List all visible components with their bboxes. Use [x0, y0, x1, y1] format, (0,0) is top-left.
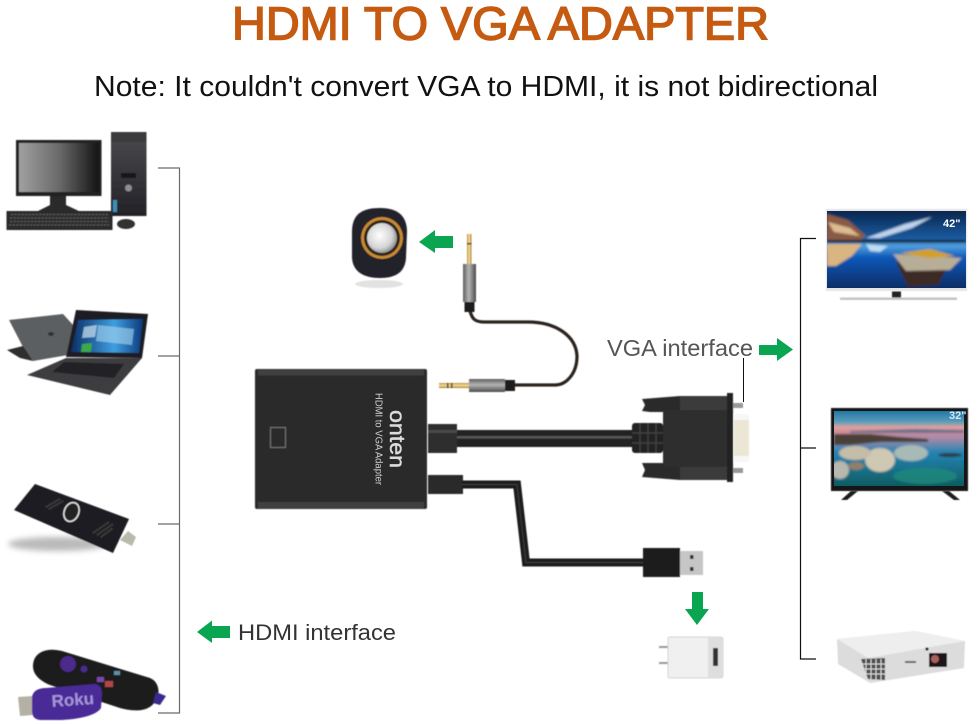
connector body	[663, 410, 728, 467]
adapter brand text: onten	[385, 410, 408, 468]
adapter body	[255, 369, 427, 509]
USB cable	[428, 475, 703, 577]
cable	[457, 430, 635, 447]
speaker body	[352, 208, 407, 278]
icon: desktop computer	[6, 132, 146, 230]
bracket: HDMI sources	[158, 168, 180, 713]
indicator square	[270, 428, 286, 448]
icon: 32 inch TV	[831, 408, 968, 500]
icon: speaker	[352, 208, 407, 288]
keyboard	[6, 211, 112, 230]
TV screen scene	[825, 209, 968, 290]
flange	[727, 393, 733, 482]
VGA pins shell	[734, 414, 749, 462]
stick shadow	[8, 537, 108, 551]
USB strain relief	[428, 475, 463, 494]
laptop screen	[66, 310, 148, 358]
Roku stick: Roku	[51, 689, 95, 711]
TV bezel	[831, 408, 968, 491]
label: VGA interface: VGA interface	[607, 335, 753, 361]
stick body	[14, 484, 129, 553]
VGA connector	[632, 393, 749, 482]
adapter model text: HDMI to VGA Adapter	[372, 393, 384, 485]
icon: laptop	[7, 310, 148, 395]
audio cable	[439, 234, 577, 392]
laptop keyboard deck	[27, 358, 142, 395]
TV frame	[826, 209, 967, 291]
bracket: VGA displays	[800, 238, 816, 659]
Roku stick	[18, 684, 102, 720]
TV stand	[840, 292, 957, 300]
laptop rear lid	[9, 314, 74, 361]
icon: 42 inch TV	[825, 209, 968, 300]
adapter box	[255, 369, 427, 509]
icon: compute stick	[8, 484, 136, 553]
USB plug	[643, 548, 703, 577]
screws	[733, 403, 743, 408]
label: HDMI interface: HDMI interface	[238, 620, 396, 645]
cable wire	[470, 311, 577, 385]
icon: USB charger	[659, 637, 723, 678]
arrow: to charger	[685, 592, 709, 625]
upper audio jack	[463, 234, 476, 312]
arrow: HDMI interface	[197, 620, 230, 643]
monitor	[16, 140, 102, 212]
vent	[861, 658, 885, 680]
TV size label 32: 32"	[949, 410, 966, 422]
TV screen scene	[831, 409, 966, 488]
tower	[111, 132, 146, 216]
leader line to VGA port	[742, 358, 744, 402]
arrow: to speaker	[419, 230, 453, 253]
icon: projector	[837, 631, 965, 683]
speaker shadow	[355, 280, 403, 288]
lower audio jack	[439, 379, 515, 392]
lens	[929, 653, 947, 667]
TV legs	[841, 491, 960, 500]
projector body	[837, 631, 965, 683]
grip relief	[632, 423, 663, 453]
VGA cable	[428, 424, 635, 453]
TV size label 42: 42"	[943, 218, 960, 230]
cable strain relief	[428, 424, 457, 453]
USB cable wire	[462, 484, 645, 562]
icon: streaming stick and remote	[18, 650, 166, 720]
mouse	[117, 219, 135, 229]
arrow: VGA interface	[759, 338, 793, 361]
remote	[33, 650, 166, 710]
projector top	[837, 631, 965, 658]
note text: Note: It couldn't convert VGA to HDMI, it is not bidirectional	[94, 71, 878, 103]
thumb grips	[642, 396, 727, 412]
HDMI plug	[120, 531, 136, 546]
